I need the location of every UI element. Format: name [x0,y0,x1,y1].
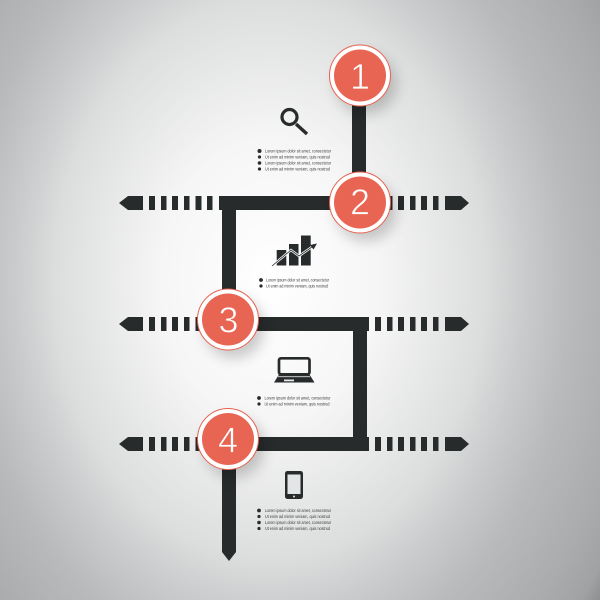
row 2 left dashed arrow [119,317,202,331]
text block 1: Lorem ipsum dolor sit amet, consectetur [265,148,331,154]
text block 3: Ut enim ad minim veniam, quis nostrud [264,402,330,406]
badge 1: 1 [350,56,370,97]
icon: bar chart with rising arrow [272,236,317,266]
icon: smartphone [285,471,303,499]
text block 2: Lorem ipsum dolor sit amet, consectetur [266,278,329,282]
row 3 right dashed arrow [375,437,469,451]
text block 1: Ut enim ad minim veniam, quis nostrud [265,166,330,172]
text block 4: Lorem ipsum dolor sit amet, consectetur [265,508,331,513]
text block 1: Ut enim ad minim veniam, quis nostrud [265,154,330,160]
badge 1 [330,45,396,114]
badge 4 [198,408,264,478]
row 1 left dashed arrow [119,196,212,210]
text block 4: Lorem ipsum dolor sit amet, consectetur [265,520,331,525]
row 1 right dashed arrow [387,196,469,210]
text block 2: Ut enim ad minim veniam, quis nostrud [266,284,328,288]
text block 2 [259,278,329,288]
row 3 left dashed arrow [119,437,202,451]
icon: magnifying glass [282,110,307,134]
text block 1: Lorem ipsum dolor sit amet, consectetur [265,160,331,166]
badge 4: 4 [218,420,238,460]
text block 3 [257,396,331,406]
badge 2: 2 [350,182,370,222]
badge 3 [198,289,264,358]
timeline connector path [219,100,369,561]
row 2 right dashed arrow [375,317,469,331]
text block 3: Lorem ipsum dolor sit amet, consectetur [264,396,331,400]
text block 4 [257,508,331,531]
badge 3: 3 [218,300,239,340]
text block 4: Ut enim ad minim veniam, quis nostrud [265,526,330,531]
icon: laptop [274,358,314,382]
text block 4: Ut enim ad minim veniam, quis nostrud [265,514,330,519]
text block 1 [258,148,331,172]
badge 2 [330,172,396,241]
